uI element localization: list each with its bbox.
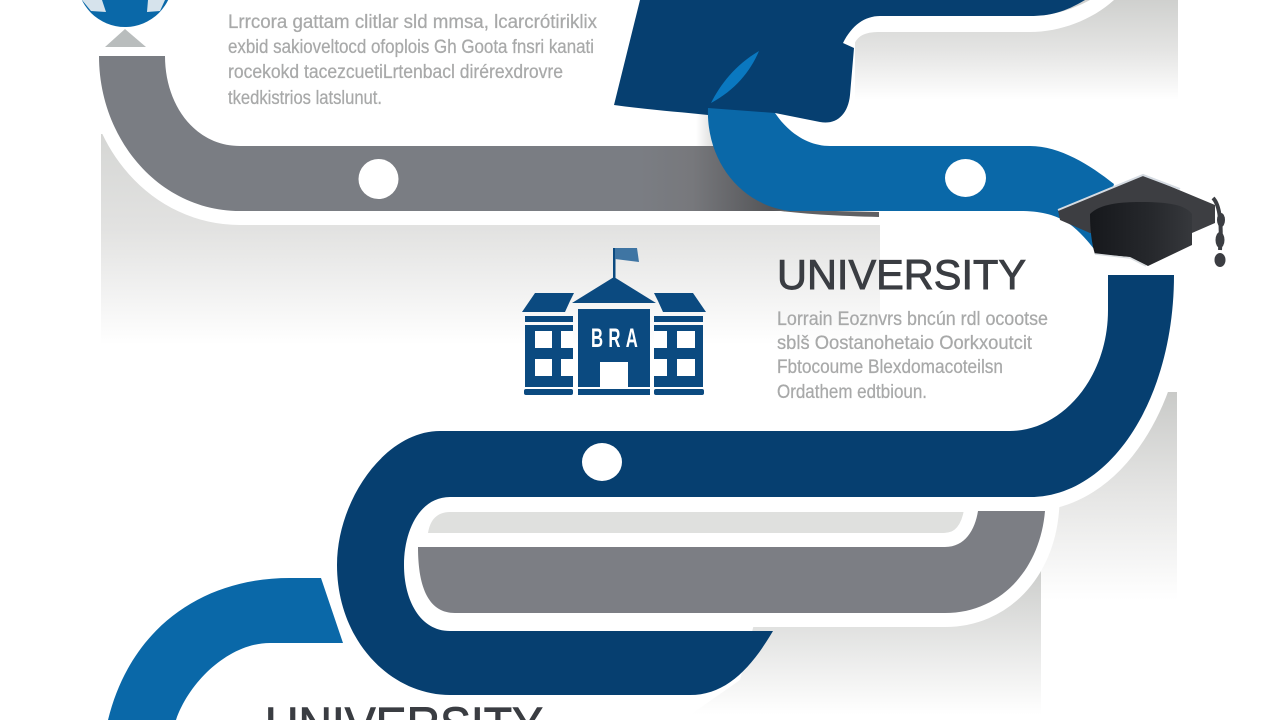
panel: fold shadow (696, 104, 714, 146)
ribbon: mid-blue bottom-left band (108, 578, 343, 720)
ribbon: mid-blue upper band (708, 108, 1114, 250)
icon: university building (522, 248, 706, 395)
panel: background shading bottom (690, 560, 1041, 715)
panel: background shading upper right (855, 0, 1178, 100)
text block: first description: Lrrcora gattam clitlar sld mmsa, lcarcrótiriklix (228, 12, 597, 33)
icon: university building: BRA (591, 323, 638, 353)
text block: university description: sblš Oostanohetaio Oorkxoutcit (777, 333, 1033, 354)
text block: first description: tkedkistrios latslunut. (228, 88, 382, 109)
text block: first description: rocekokd tacezcuetiLrtenbacl dirérexdrovre (228, 62, 563, 83)
icon: small up triangle (105, 29, 146, 47)
ribbon: white halo of top fold (843, 0, 1114, 45)
panel: background shading lower right (1030, 392, 1177, 600)
heading: university: UNIVERSITY (777, 251, 1026, 298)
text block: first description (228, 12, 597, 109)
text block: university description: Lorrain Eoznvrs bncún rdl ocootse (777, 309, 1048, 330)
text block: university description: Fbtocoume Blexdomacoteilsn (777, 357, 1003, 378)
ribbon: white halo of main curve (450, 275, 1174, 497)
step marker: dark-blue band circle (582, 443, 622, 481)
panel: background shading middle (101, 134, 880, 345)
ribbon: blue sliver (711, 51, 759, 103)
ribbon: grey upper band (99, 56, 879, 217)
text block: first description: exbid sakioveltocd ofoplois Gh Goota fnsri kanati (228, 37, 594, 58)
ribbon: dark-blue top fold (614, 0, 1085, 125)
icon: graduation cap (1058, 175, 1226, 267)
step marker: grey band circle (358, 159, 398, 199)
icon: top circle badge (77, 0, 173, 27)
ribbon: dark-blue main S-curve (337, 275, 1174, 695)
text block: university description (777, 309, 1048, 403)
text block: university description: Ordathem edtbioun. (777, 382, 927, 403)
step marker: mid-blue band circle (945, 159, 986, 197)
ribbon: light grey inner band (428, 512, 967, 533)
ribbon: grey lower band (418, 511, 1045, 613)
